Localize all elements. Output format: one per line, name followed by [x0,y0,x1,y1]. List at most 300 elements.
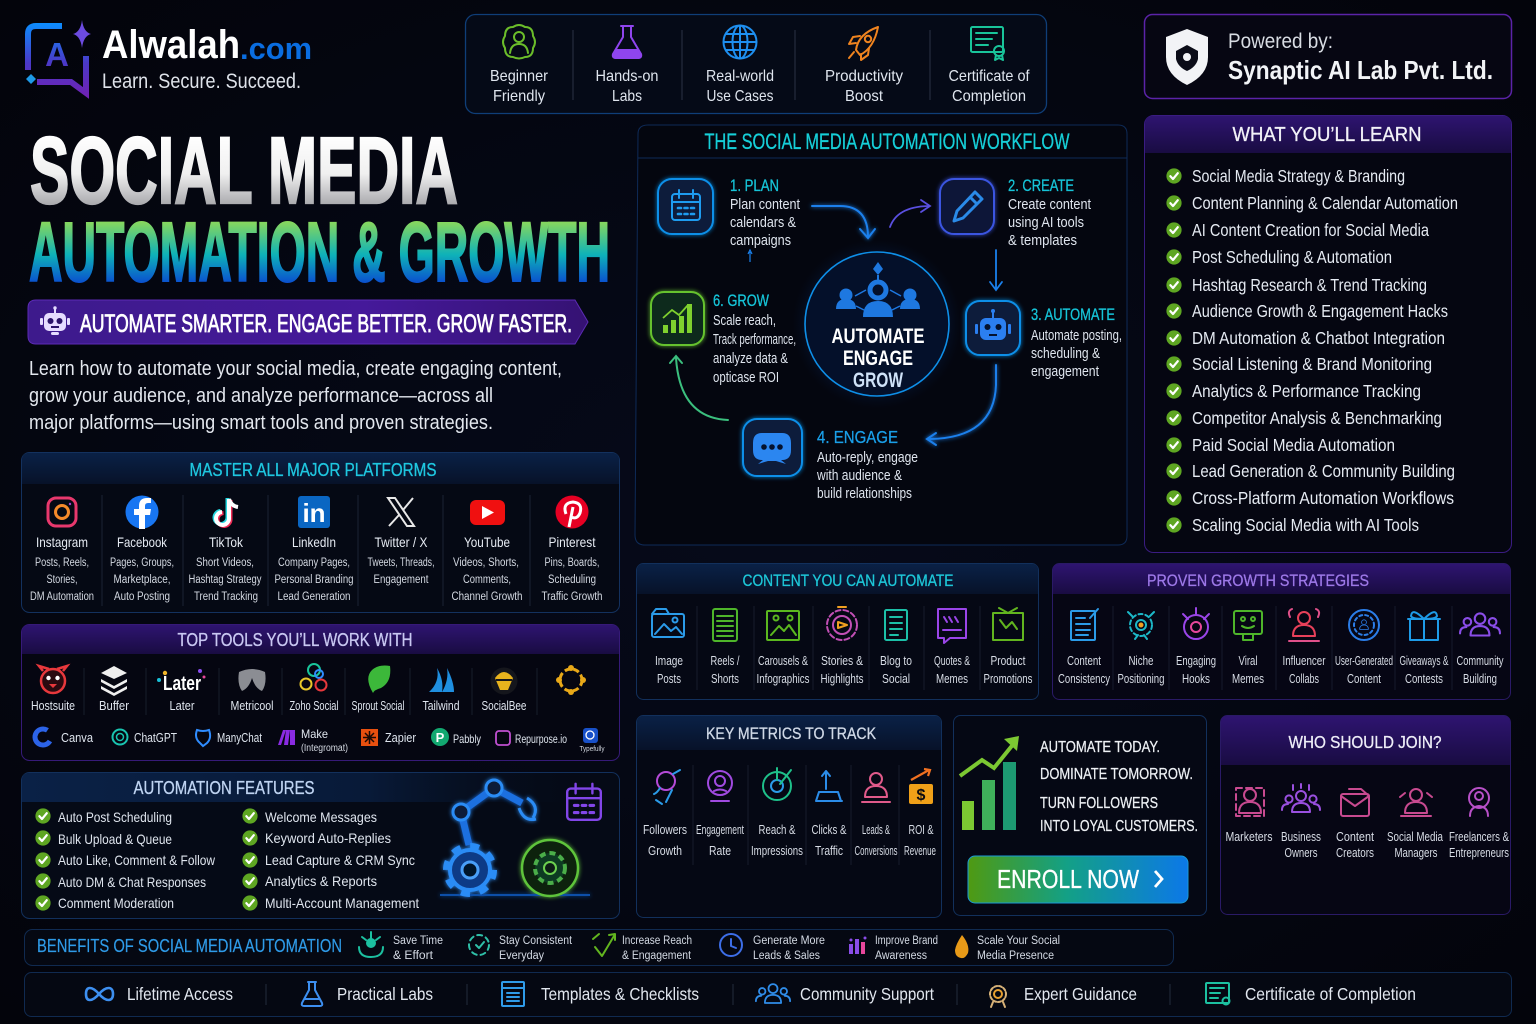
tool: typefully [580,728,605,753]
audience: social media managers: Social Media [1387,830,1443,844]
central hub [792,239,962,409]
platform: pinterest: Pinterest [548,534,596,550]
platform: twitter / x: Twitter / X [374,534,428,550]
feature list left: Comment Moderation [58,895,174,911]
audience: social media managers [1387,789,1443,860]
item: content consistency [1058,609,1111,686]
item: reels / shorts: Shorts [711,672,739,686]
metric: leads: Conversions [854,844,898,858]
item: product promotions [984,608,1032,686]
benefit: generate leads [720,934,825,962]
badge: beginner friendly [490,25,549,105]
badge: hands-on labs: Hands-on [596,68,658,85]
item: quotes & memes: Memes [936,672,968,686]
tool: typefully: Typefully [580,746,605,753]
panel: who should join [1220,716,1510,914]
icon: growth chart [960,736,1019,830]
platform: twitter / x: Tweets, Threads, [368,557,434,569]
step 2: create: 2. CREATE [1008,177,1074,195]
benefit: increase reach: & Engagement [622,950,692,962]
item: product promotions: Promotions [984,672,1032,686]
brand name: Alwalah [102,23,240,67]
item: viral memes: Viral [1238,654,1258,668]
badge: hands-on labs: Labs [612,88,642,105]
platform: facebook: Auto Posting [114,591,170,603]
platform: youtube: Videos, Shorts, [453,557,519,569]
step 4: engage: build relationships [817,486,912,502]
benefit: increase reach: Increase Reach [622,935,692,947]
perk: expert guidance [990,984,1137,1007]
item: content consistency: Content [1067,654,1101,668]
step 4: engage: Auto-reply, engage [817,450,918,466]
intro text: grow your audience, and analyze performance—across all [29,385,493,407]
tool: socialbee [482,668,527,713]
perk: lifetime access: Lifetime Access [127,984,233,1004]
metric: roi: Revenue [904,844,936,858]
perk: certificate [1206,983,1416,1004]
feature list right: Lead Capture & CRM Sync [265,852,415,868]
step 6: grow: opticase ROI [713,370,779,386]
platform: linkedin: LinkedIn [292,534,336,550]
perk: certificate: Certificate of Completion [1245,984,1416,1004]
perk: lifetime access [86,984,233,1004]
central hub: GROW [853,369,903,392]
benefit: increase reach [593,934,692,962]
feature list left: Auto Like, Comment & Follow [58,852,216,868]
item: influencer collabs: Influencer [1282,654,1326,668]
metric: reach: Reach & [758,823,796,837]
learning list: Hashtag Research & Trend Tracking [1192,275,1427,295]
platform: facebook: Marketplace, [114,574,170,586]
tool: make [278,727,348,754]
item: quotes & memes [934,609,970,686]
tool: zapier: Zapier [385,730,417,745]
arrow: hub to create [890,200,930,227]
audience: business owners: Owners [1284,846,1318,860]
powered by label: Powered by: [1228,30,1333,53]
ribbon text: AUTOMATE SMARTER. ENGAGE BETTER. GROW FASTER. [80,310,572,338]
platform: facebook: Pages, Groups, [110,557,174,569]
audience: marketers [1226,788,1272,844]
step 2: create [940,177,1091,249]
benefit: scale presence [955,935,1060,962]
badge: real-world use cases: Use Cases [706,88,774,105]
step 1: plan: Plan content [730,197,800,213]
tool: buffer: Buffer [99,699,129,713]
item: blog to social: Social [882,672,910,686]
heading: BENEFITS OF SOCIAL MEDIA AUTOMATION [37,935,342,956]
panel: content you can automate [636,564,1038,700]
metric: clicks: Traffic [815,844,843,858]
learning list: Social Listening & Brand Monitoring [1192,354,1432,374]
tool: repurpose.io: Repurpose.io [515,734,567,746]
tool: pabbly: Pabbly [453,732,481,746]
metric: leads: Leads & [862,823,890,837]
platform: tiktok [188,498,262,603]
step 3: automate: scheduling & [1031,346,1100,362]
learning list: Competitor Analysis & Benchmarking [1192,408,1442,428]
metric: reach [751,768,803,858]
platform: linkedin: Lead Generation [278,591,350,603]
audience: freelancers: Freelancers & [1449,830,1510,844]
arrow: engage to grow [670,356,728,420]
item: carousels: Infographics [756,672,810,686]
platform: instagram [30,498,94,603]
tool: buffer [99,666,129,713]
audience: business owners [1281,784,1321,860]
perk: practical labs: Practical Labs [337,984,433,1004]
platform: youtube [452,500,522,603]
central hub: AUTOMATE [832,325,924,348]
cta text: TURN FOLLOWERS [1040,795,1158,812]
step 2: create: using AI tools [1008,215,1084,231]
step 3: automate: Automate posting, [1031,328,1122,344]
tool: tailwind [422,668,460,713]
item: content consistency: Consistency [1058,672,1111,686]
tool: chatgpt: ChatGPT [134,730,177,745]
platform: instagram: Stories, [46,574,78,586]
title line 2: AUTOMATION & GROWTH [29,205,610,299]
tool: manychat: ManyChat [217,730,262,745]
item: carousels: Carousels & [758,654,808,668]
item: engaging hooks [1176,608,1216,686]
badge: hands-on labs [596,26,658,105]
step 2: create: Create content [1008,197,1091,213]
platform: pinterest [542,496,602,603]
enroll button: ENROLL NOW [997,864,1139,894]
brand domain: .com [240,31,312,66]
panel: footer perks [24,972,1512,1016]
item: carousels [756,611,810,686]
badge: real-world use cases: Real-world [706,68,774,85]
item: image posts: Image [655,654,683,668]
tool: hootsuite [31,666,75,713]
item: product promotions: Product [990,654,1026,668]
tagline: Learn. Secure. Succeed. [102,70,301,93]
benefit: generate leads: Leads & Sales [753,950,820,962]
feature list left [35,808,216,911]
badge: productivity boost: Boost [845,88,884,105]
item: niche positioning [1118,612,1165,686]
platform: linkedin: Company Pages, [278,557,350,569]
tool: metricool: Metricool [230,699,274,713]
icon: robot [40,306,70,335]
learning list: Post Scheduling & Automation [1192,247,1392,267]
company name: Synaptic AI Lab Pvt. Ltd. [1228,55,1493,85]
arrow: automate to engage [927,365,996,445]
arrow: plan to hub [812,206,875,238]
item: influencer collabs: Collabs [1289,672,1319,686]
panel: top tools [22,624,620,760]
metric: followers growth: Followers [643,823,687,837]
step 3: automate: engagement [1031,364,1099,380]
benefit: save time [359,932,443,962]
step 3: automate [966,301,1122,380]
arrow: create to automate [990,250,1002,290]
tool: pabbly: P [436,730,445,745]
audience: business owners: Business [1281,830,1321,844]
feature list right: Multi-Account Management [265,895,419,911]
tool: make: (Integromat) [301,743,348,754]
tool: unnamed yellow ring [556,665,586,695]
learning list [1166,166,1458,535]
platform: youtube: Channel Growth [452,591,522,603]
step 1: plan: 1. PLAN [730,177,779,195]
learning list: DM Automation & Chatbot Integration [1192,328,1445,348]
item: engaging hooks: Engaging [1176,654,1216,668]
item: reels / shorts [710,609,740,686]
metric: followers growth [643,770,687,858]
benefit: scale presence: Media Presence [977,950,1054,962]
platform: youtube: Comments, [463,574,511,586]
icon: people network [836,262,920,317]
tool row 2 [32,726,605,754]
ribbon: tagline [28,300,588,344]
learning list: Content Planning & Calendar Automation [1192,193,1458,213]
badge: beginner friendly: Beginner [490,68,549,85]
platform: tiktok: TikTok [209,534,244,550]
badge: productivity boost: Productivity [825,68,903,85]
tool: later: Later [163,673,201,695]
tool: chatgpt [112,730,177,745]
platform: facebook [110,496,174,603]
tool: later: Later [170,699,194,713]
item: community building: Community [1456,654,1504,668]
tool: canva: Canva [61,730,94,745]
step 4: engage [743,419,918,502]
step 6: grow: analyze data & [713,351,788,367]
audience: content creators [1336,789,1374,860]
feature list left: Auto Post Scheduling [58,809,172,825]
panel: automation features [22,772,620,918]
title [29,118,610,299]
item: community building [1456,613,1504,686]
panel: proven growth strategies [1052,564,1510,700]
step 2: create: & templates [1008,233,1077,249]
heading: THE SOCIAL MEDIA AUTOMATION WORKFLOW [704,129,1070,154]
small stray arrow [748,250,752,262]
illustration: robot arm and gears [440,780,590,896]
item: image posts: Posts [657,672,681,686]
metric: clicks [812,771,847,858]
platform: linkedin: Personal Branding [274,574,354,586]
badge: certificate [948,27,1030,105]
perk: practical labs [302,982,433,1006]
tool: sprout social [352,666,404,713]
badge: productivity boost [825,27,903,105]
cta text: INTO LOYAL CUSTOMERS. [1040,818,1198,835]
metric: reach: Impressions [751,844,803,858]
step 6: grow: 6. GROW [713,292,769,310]
metric: roi: ROI & [908,823,934,837]
panel: top badges [466,14,1046,114]
heading: WHAT YOU’LL LEARN [1232,124,1422,146]
platform: twitter / x: Engagement [374,574,429,586]
item: image posts [652,609,684,686]
tool: canva [32,726,94,748]
heading: KEY METRICS TO TRACK [706,724,877,743]
metric: followers growth: Growth [648,844,682,858]
feature list left: Auto DM & Chat Responses [58,874,206,890]
step 1: plan: calendars & [730,215,796,231]
heading: CONTENT YOU CAN AUTOMATE [742,571,954,590]
item: niche positioning: Niche [1128,654,1154,668]
audience: content creators: Creators [1336,846,1374,860]
item: giveaways: Giveaways & [1400,654,1449,668]
platform: tiktok: Trend Tracking [194,591,258,603]
platform: instagram: Instagram [36,534,88,550]
perk: community support: Community Support [800,984,934,1004]
audience: social media managers: Managers [1394,846,1438,860]
intro text: Learn how to automate your social media, create engaging content, [29,358,562,380]
metric: clicks: Clicks & [812,823,847,837]
platform: instagram: Posts, Reels, [35,557,89,569]
platform: instagram: DM Automation [30,591,94,603]
tool: zoho social [290,664,338,713]
icon: logo speech bubble: A [45,36,69,73]
item: quotes & memes: Quotes & [934,654,970,668]
audience: freelancers [1449,788,1510,860]
feature list right [242,808,419,911]
step 6: grow: Scale reach, [713,313,776,329]
icon: calendar [567,784,601,820]
metric: roi [904,769,936,858]
enroll button [968,856,1188,903]
learning list: Paid Social Media Automation [1192,435,1395,455]
heading: AUTOMATION FEATURES [134,778,314,798]
intro text: major platforms—using smart tools and proven strategies. [29,412,493,434]
metric: roi: $ [917,787,926,804]
panel: workflow [635,125,1127,545]
learning list: Scaling Social Media with AI Tools [1192,515,1419,535]
tool: sprout social: Sprout Social [352,699,404,713]
item: user-generated content: Content [1347,672,1381,686]
panel: key metrics to track [636,716,942,918]
platform: twitter / x [368,498,434,586]
learning list: Analytics & Performance Tracking [1192,381,1421,401]
item: user-generated content [1335,610,1393,686]
platform: tiktok: Hashtag Strategy [188,574,262,586]
title line 1: SOCIAL MEDIA [30,118,458,224]
tool: zapier [361,729,417,746]
feature list right: Keyword Auto-Replies [265,830,391,846]
panel: powered by [1144,14,1512,98]
badge: beginner friendly: Friendly [493,88,545,105]
tool: hootsuite: Hostsuite [31,699,75,713]
cta text [1040,739,1198,835]
item: stories: Highlights [820,672,864,686]
benefit: brand awareness: Awareness [875,950,927,962]
benefit: save time: & Effort [393,950,434,962]
platform: facebook: Facebook [117,534,168,550]
item: engaging hooks: Hooks [1182,672,1210,686]
central hub: ENGAGE [843,347,913,370]
item: stories [820,607,864,686]
heading: WHO SHOULD JOIN? [1288,732,1442,752]
learning list: AI Content Creation for Social Media [1192,220,1429,240]
step 6: grow: Track performance, [713,332,796,348]
metric: engagement rate: Engagement [696,823,744,837]
benefit: stay consistent [469,935,573,962]
item: niche positioning: Positioning [1118,672,1165,686]
step 1: plan: campaigns [730,233,791,249]
feature list left: Bulk Upload & Queue [58,831,172,847]
item: viral memes: Memes [1232,672,1264,686]
tool: zoho social: Zoho Social [290,699,338,713]
metric: leads [854,773,898,858]
step 3: automate: 3. AUTOMATE [1031,306,1115,324]
intro text [29,358,562,434]
tool: later [157,669,206,713]
panel: call to action [954,716,1206,916]
item: viral memes [1232,611,1264,686]
item: user-generated content: User-Generated [1335,654,1393,668]
heading: PROVEN GROWTH STRATEGIES [1147,571,1369,590]
metric: engagement rate: Rate [709,844,731,858]
step 4: engage: 4. ENGAGE [817,427,898,447]
tool: socialbee: SocialBee [482,699,527,713]
heading: MASTER ALL MAJOR PLATFORMS [190,460,436,480]
benefit: brand awareness [849,935,938,962]
perk: templates: Templates & Checklists [541,984,699,1004]
benefit: stay consistent: Stay Consistent [499,935,573,947]
heading: TOP TOOLS YOU’LL WORK WITH [178,630,412,650]
audience: freelancers: Entrepreneurs [1449,846,1509,860]
benefit: scale presence: Scale Your Social [977,935,1060,947]
logo: Alwalah.com [26,20,312,93]
item: reels / shorts: Reels / [710,654,740,668]
learning list: Audience Growth & Engagement Hacks [1192,301,1448,321]
badge: certificate: Certificate of [948,68,1030,85]
tool: make: Make [301,727,328,741]
panel: master all major platforms [22,452,620,612]
item: giveaways: Contests [1405,672,1443,686]
learning list: Lead Generation & Community Building [1192,461,1455,481]
icon: logo speech bubble [26,20,91,93]
audience: content creators: Content [1336,830,1374,844]
platform: youtube: YouTube [464,534,510,550]
panel: benefits strip [24,930,1174,966]
cta text: DOMINATE TOMORROW. [1040,766,1193,783]
badge: certificate: Completion [952,88,1026,105]
platform: pinterest: Traffic Growth [542,591,602,603]
feature list right: Analytics & Reports [265,873,377,889]
tool: pabbly [431,728,481,746]
learning list: Cross-Platform Automation Workflows [1192,488,1454,508]
item: giveaways [1400,612,1449,686]
platform: linkedin [274,496,354,603]
step 6: grow [651,292,796,386]
cta text: AUTOMATE TODAY. [1040,739,1160,756]
item: blog to social [880,610,912,686]
platform: pinterest: Pins, Boards, [544,557,600,569]
learning list: Social Media Strategy & Branding [1192,166,1405,186]
item: influencer collabs [1282,609,1326,686]
perk: community support [756,984,934,1004]
item: blog to social: Blog to [880,654,912,668]
platform: tiktok: Short Videos, [196,557,254,569]
step 4: engage: with audience & [816,468,902,484]
tool: manychat [196,730,262,746]
benefit: brand awareness: Improve Brand [875,935,938,947]
step 1: plan [658,177,800,249]
perk: templates [502,982,699,1006]
badge: real-world use cases [706,26,774,105]
item: community building: Building [1463,672,1497,686]
item: stories: Stories & [821,654,864,668]
benefit: stay consistent: Everyday [499,950,544,962]
panel: what you'll learn [1144,116,1512,552]
